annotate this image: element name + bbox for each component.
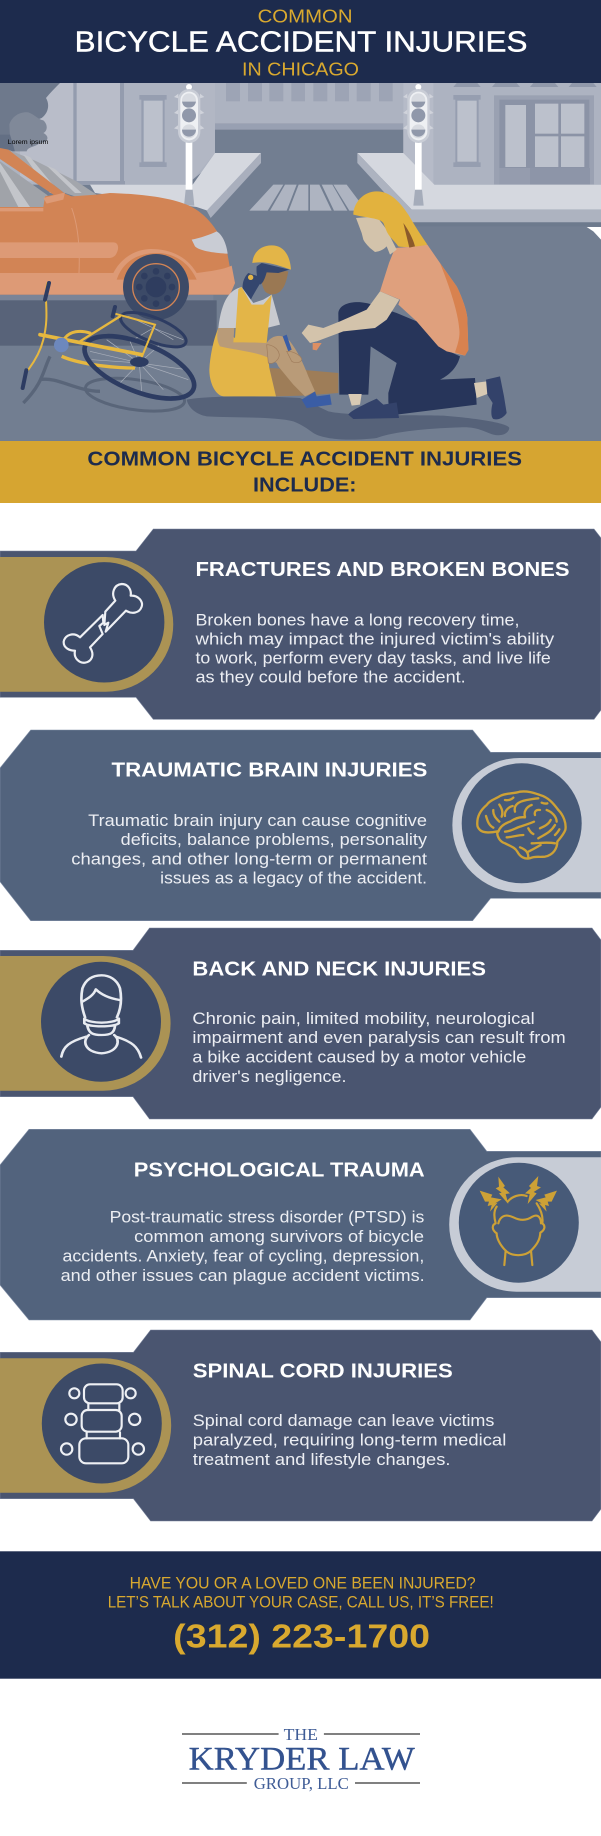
description: Post-traumatic stress disorder (PTSD) is [110,1209,424,1227]
logo: The Kryder Law Group, LLC: THE [284,1725,318,1744]
illustration: street scene with cyclist accident [0,83,601,441]
description: Spinal cord damage can leave victims [193,1412,494,1430]
gold subheading band: INCLUDE: [253,474,356,497]
girl with helmet [209,245,338,408]
gold subheading band: COMMON BICYCLE ACCIDENT INJURIES [87,448,522,471]
panel: spinal cord injuries [0,1330,601,1521]
call to action band: LET’S TALK ABOUT YOUR CASE, CALL US, IT’S FREE! [108,1593,494,1611]
woman kneeling [302,191,507,419]
logo: The Kryder Law Group, LLC: KRYDER LAW [189,1741,416,1777]
traffic light right [403,84,434,206]
description: deficits, balance problems, personality [121,831,428,849]
logo: The Kryder Law Group, LLC: GROUP, LLC [254,1774,349,1793]
description [192,1010,566,1086]
icon: broken bone [64,584,142,663]
description: treatment and lifestyle changes. [193,1451,450,1469]
call to action band: (312) 223-1700 [173,1618,430,1655]
bicycle [23,283,202,416]
heading: BACK AND NECK INJURIES [192,957,486,980]
description: a bike accident caused by a motor vehicle [192,1049,526,1067]
header: COMMON [258,6,353,27]
smoke [0,83,60,151]
description [61,1209,425,1285]
panel: fractures and broken bones [0,529,601,719]
icon: head with lightning bolts [480,1176,557,1265]
description: impairment and even paralysis can result from [192,1029,566,1047]
gold subheading band [0,441,601,503]
description: accidents. Anxiety, fear of cycling, depression, [62,1248,424,1266]
heading: PSYCHOLOGICAL TRAUMA [134,1159,425,1182]
description: issues as a legacy of the accident. [160,869,427,887]
left sidewalk [90,153,261,218]
panel: psychological trauma [0,1129,601,1320]
description: Broken bones have a long recovery time, [196,611,519,629]
header: BICYCLE ACCIDENT INJURIES [75,27,527,59]
description [194,611,555,686]
left building [0,83,215,185]
description: driver's negligence. [192,1068,346,1086]
right building [403,83,601,185]
description: which may impact the injured victim's ability [194,630,555,648]
heading: SPINAL CORD INJURIES [193,1360,453,1383]
crosswalk [249,185,362,211]
road shadows [0,295,509,440]
description [71,812,428,887]
header: IN CHICAGO [242,59,359,80]
heading: TRAUMATIC BRAIN INJURIES [112,759,427,782]
call to action band [0,1551,601,1679]
description [193,1412,506,1469]
description: Chronic pain, limited mobility, neurological [192,1010,535,1028]
heading: FRACTURES AND BROKEN BONES [196,558,570,581]
icon: spine vertebrae [61,1384,144,1463]
lorem ipsum label: Lorem ipsum [8,139,49,146]
description: changes, and other long-term or permanent [71,850,427,868]
traffic light left [174,84,204,206]
icon: person with neck brace [61,975,141,1058]
description: common among survivors of bicycle [134,1228,424,1246]
panel: traumatic brain injuries [0,730,601,921]
description: to work, perform every day tasks, and live life [196,649,551,667]
panel: back and neck injuries [0,928,601,1119]
description: paralyzed, requiring long-term medical [193,1431,506,1449]
description: Traumatic brain injury can cause cognitive [88,812,427,830]
car [0,148,235,320]
call to action band: HAVE YOU OR A LOVED ONE BEEN INJURED? [130,1574,476,1592]
logo: The Kryder Law Group, LLC [182,1725,420,1793]
icon: brain [477,791,566,859]
description: and other issues can plague accident victims. [61,1267,425,1285]
right sidewalk [357,153,601,240]
description: as they could before the accident. [196,668,466,686]
header [0,0,601,83]
